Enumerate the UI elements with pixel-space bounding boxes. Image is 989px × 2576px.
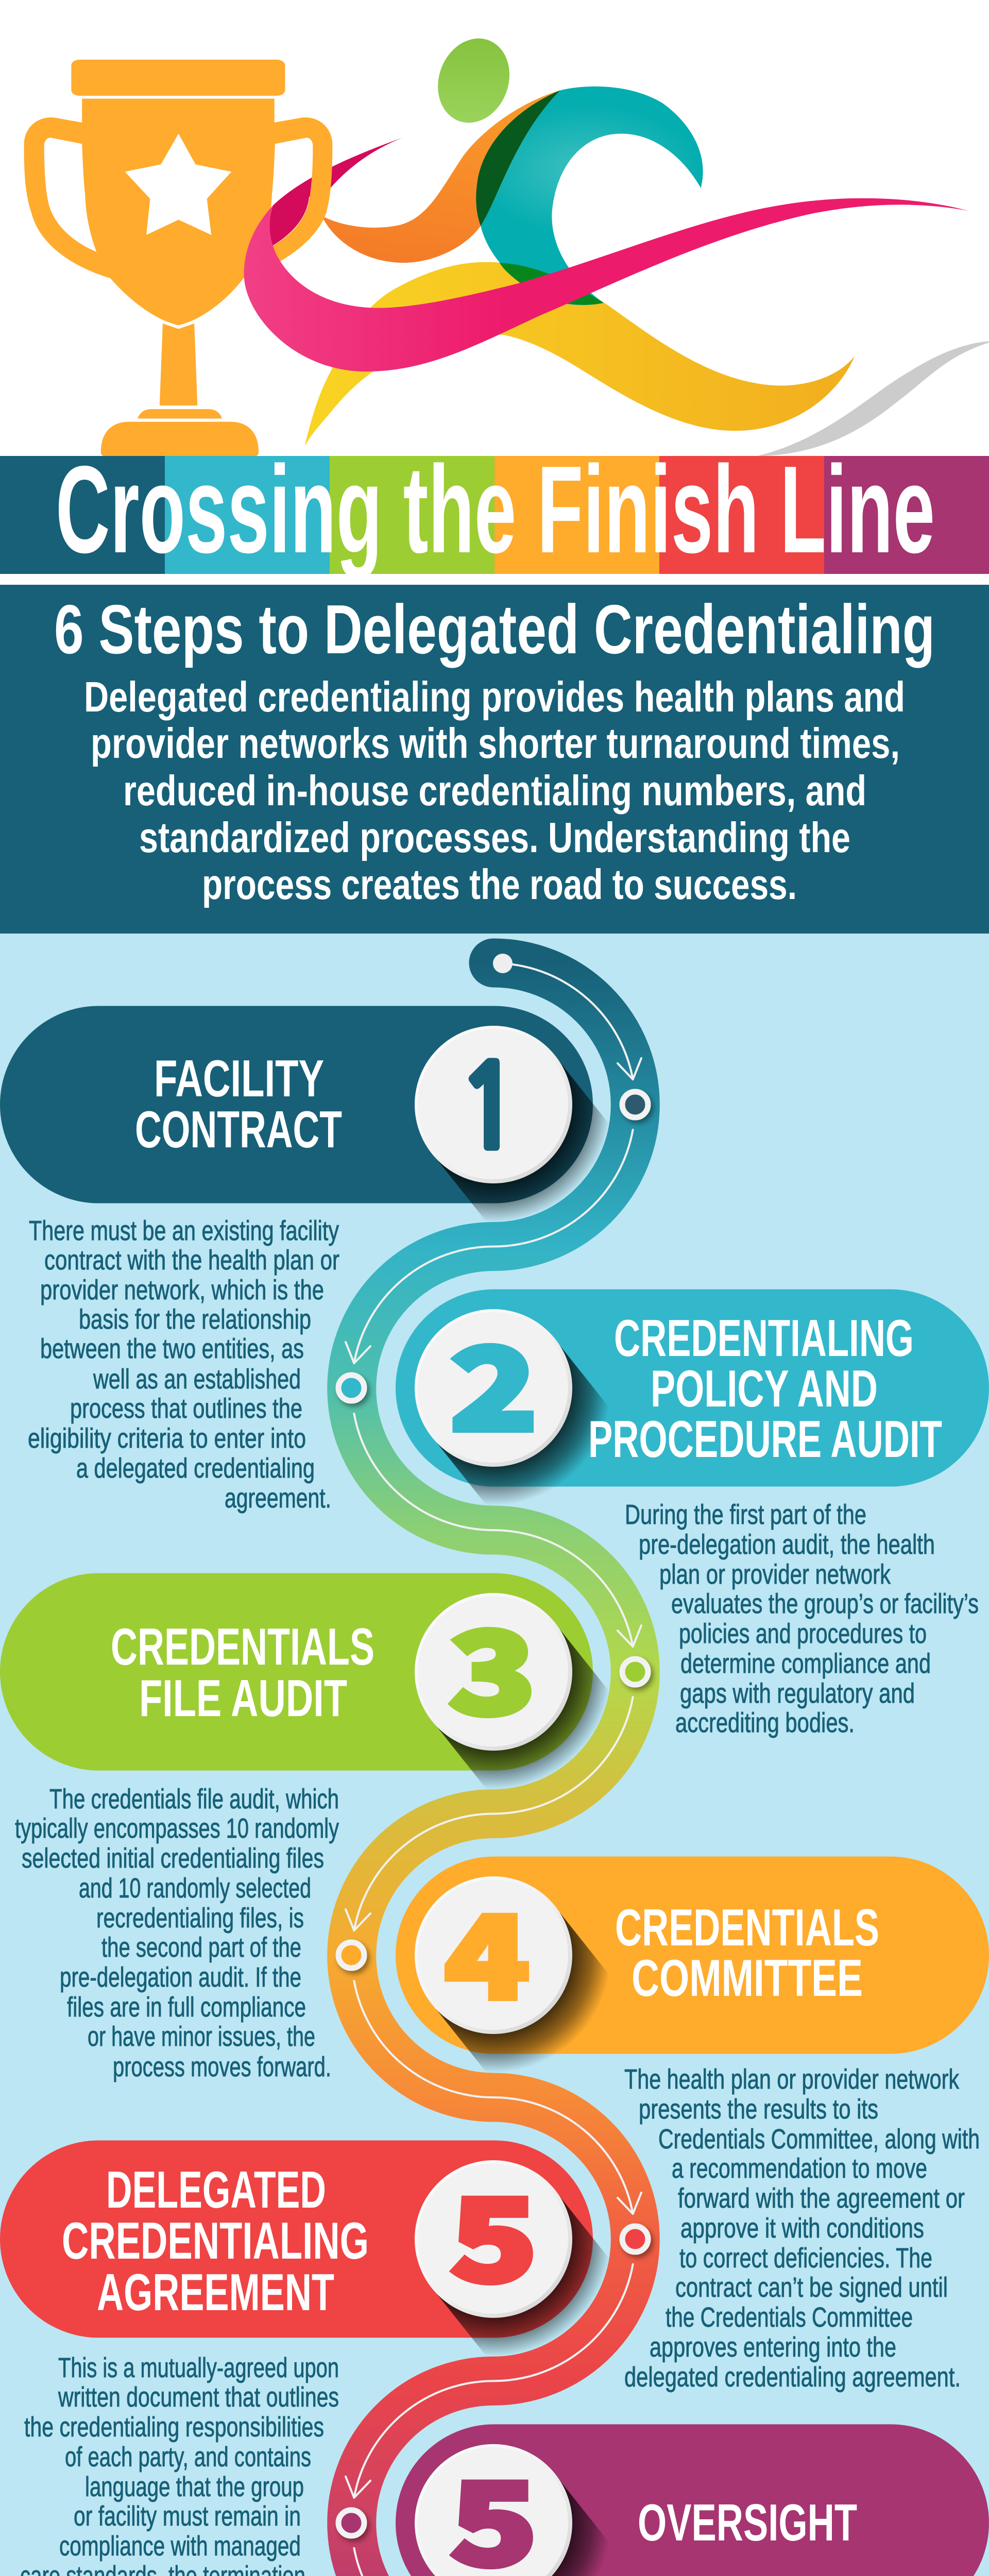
step 4 title: COMMITTEE — [632, 1950, 863, 2007]
steps background — [0, 934, 989, 2576]
step 3 badge — [0, 1573, 651, 1841]
step 5 title: CREDENTIALING — [62, 2212, 369, 2270]
intro panel — [0, 585, 989, 934]
step 2 badge: 2 — [450, 1297, 538, 1463]
step 3 text: recredentialing files, is — [96, 1903, 304, 1934]
step 1 text: eligibility criteria to enter into — [28, 1423, 306, 1454]
trophy — [24, 60, 332, 456]
step 1 text: between the two entities, as — [40, 1333, 304, 1364]
step 4 text: approves entering into the — [650, 2332, 896, 2363]
step 3 title: CREDENTIALS — [111, 1618, 374, 1676]
step 3 text: selected initial credentialing files — [22, 1843, 324, 1874]
step 1 title: CONTRACT — [135, 1101, 342, 1159]
step 5 text: of each party, and contains — [65, 2442, 311, 2472]
step 4 title — [615, 1899, 879, 2007]
trophy stem — [160, 324, 197, 405]
step 4 badge — [396, 1857, 989, 2125]
step 5 badge — [0, 2140, 651, 2409]
step 1 text — [28, 1215, 339, 1514]
magenta swoosh — [244, 198, 968, 371]
step 5 text: This is a mutually-agreed upon — [58, 2352, 339, 2383]
step 2 text: gaps with regulatory and — [680, 1678, 915, 1709]
dark green overlap — [476, 90, 560, 226]
intro paragraph — [84, 673, 905, 908]
step 3 text: files are in full compliance — [67, 1992, 306, 2023]
step 1 text: well as an established — [93, 1364, 301, 1395]
step 4 text — [624, 2064, 980, 2393]
gray ribbon — [757, 341, 989, 456]
trophy star — [125, 134, 231, 235]
road guide lines and arrows — [346, 963, 641, 2576]
green overlap lower — [500, 263, 604, 305]
step 5 text: the credentialing responsibilities — [24, 2412, 324, 2443]
step 2 text: During the first part of the — [625, 1499, 866, 1530]
step 3 title: FILE AUDIT — [139, 1670, 347, 1727]
step 1 text: basis for the relationship — [79, 1304, 311, 1335]
step 1 text: a delegated credentialing — [76, 1453, 315, 1484]
step 1 text: agreement. — [225, 1483, 331, 1514]
step 2 title — [588, 1310, 942, 1468]
step 1 text: provider network, which is the — [40, 1275, 324, 1306]
crimson ribbon behind trophy — [269, 138, 402, 246]
step 3 badge: 3 — [448, 1581, 536, 1747]
step 1 text: contract with the health plan or — [44, 1245, 339, 1276]
step 3 text: the second part of the — [101, 1932, 301, 1963]
step 3 text: The credentials file audit, which — [49, 1784, 339, 1815]
step 5 text: language that the group — [85, 2471, 304, 2502]
step 5 title: AGREEMENT — [97, 2264, 334, 2321]
trophy base — [101, 409, 259, 456]
step 1 title — [135, 1050, 342, 1159]
step 5 text: or facility must remain in — [74, 2501, 301, 2532]
step 4 text: presents the results to its — [639, 2094, 878, 2125]
step 3 text — [15, 1784, 339, 2082]
step 6 badge — [396, 2425, 989, 2576]
step 3 title — [111, 1618, 374, 1727]
step 4 badge: 4 — [445, 1866, 530, 2031]
step 1 title: FACILITY — [154, 1050, 324, 1108]
step 2 text: accrediting bodies. — [675, 1707, 855, 1738]
step 4 text: approve it with conditions — [680, 2213, 924, 2244]
step 4 title: CREDENTIALS — [615, 1899, 879, 1957]
step 4 text: the Credentials Committee — [666, 2302, 913, 2333]
step 5 text: written document that outlines — [58, 2382, 339, 2413]
step 3 text: pre-delegation audit. If the — [60, 1962, 301, 1993]
step 1 badge: 1 — [457, 1052, 521, 1165]
step 5 text — [20, 2352, 339, 2576]
step 3 text: typically encompasses 10 randomly — [15, 1813, 339, 1844]
step 1 badge — [0, 1006, 651, 1274]
road start dot — [493, 954, 513, 973]
header illustration: runner and trophy — [24, 37, 989, 456]
runner head — [432, 37, 515, 125]
step 3 text: process moves forward. — [113, 2052, 331, 2082]
step 5 text: compliance with managed — [59, 2531, 301, 2562]
step 3 text: or have minor issues, the — [88, 2021, 315, 2052]
teal runner torso — [481, 87, 703, 305]
step 1 text: process that outlines the — [70, 1393, 302, 1424]
orange runner arm — [321, 90, 560, 263]
trophy cup with handles — [24, 99, 332, 325]
step 2 title: POLICY AND — [651, 1360, 878, 1418]
step 5 title — [62, 2161, 369, 2321]
step 2 badge — [396, 1289, 989, 1557]
trophy lid — [71, 60, 285, 96]
winding road — [352, 963, 635, 2576]
step 5 title: DELEGATED — [106, 2161, 326, 2219]
step 1 text: There must be an existing facility — [29, 1215, 339, 1246]
step 3 text: and 10 randomly selected — [79, 1873, 311, 1904]
step 5 badge: 5 — [450, 2148, 538, 2314]
yellow runner leg — [304, 262, 855, 446]
road nodes — [338, 1092, 648, 2536]
intro paragraph: process creates the road to success. — [202, 860, 797, 908]
step 6 title: OVERSIGHT — [638, 2494, 857, 2552]
step 2 text: plan or provider network — [659, 1559, 891, 1590]
step 2 text — [625, 1499, 979, 1738]
